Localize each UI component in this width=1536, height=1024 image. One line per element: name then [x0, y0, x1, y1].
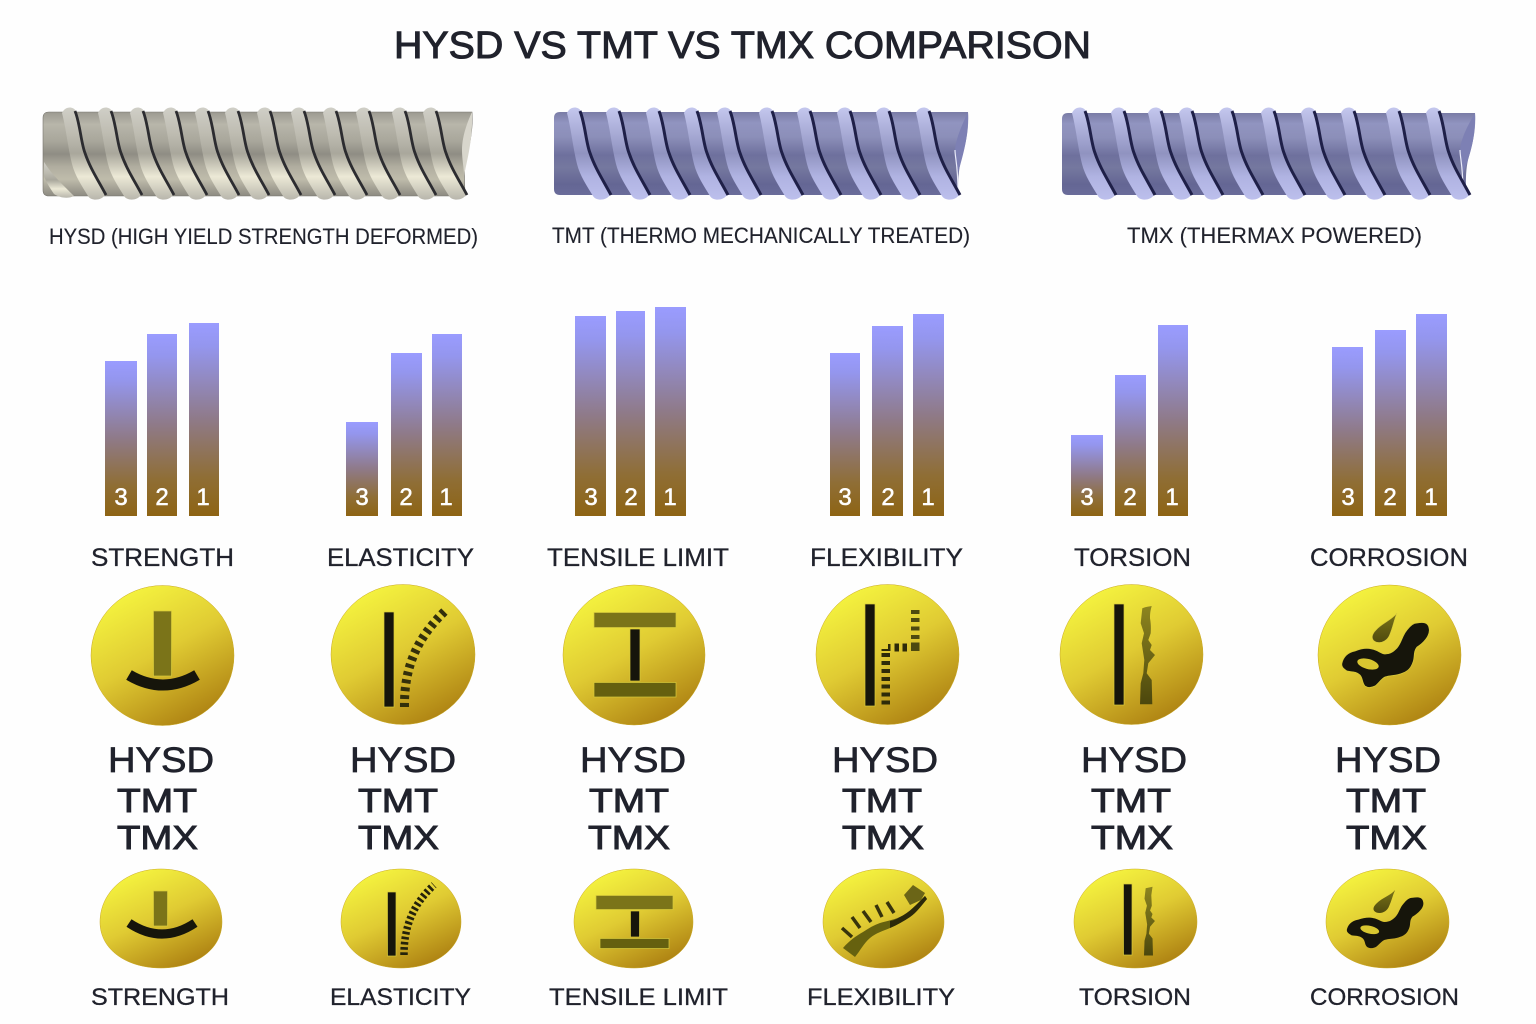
bar chart: strength: 3 [114, 484, 128, 511]
bottom label: strength: STRENGTH [91, 984, 229, 1011]
name stack: tensile limit column: TMT [589, 782, 669, 819]
bar chart: tensile limit: 2 [624, 484, 638, 511]
small icon: corrosion [1326, 869, 1449, 968]
name stack: tensile limit column [580, 741, 686, 856]
icon: corrosion [1318, 585, 1461, 725]
rebar illustration: TMX [1062, 107, 1475, 200]
small icon: elasticity [341, 869, 461, 968]
label: elasticity: ELASTICITY [327, 544, 474, 572]
bar chart: corrosion: 1 [1424, 484, 1438, 511]
name stack: strength column: HYSD [108, 741, 214, 780]
small icon: torsion [1074, 869, 1197, 968]
name stack: corrosion column: TMX [1346, 819, 1427, 856]
bar chart: flexibility: 2 [881, 484, 895, 511]
name stack: torsion column: TMT [1091, 782, 1171, 819]
small icon: flexibility [823, 869, 944, 968]
name stack: flexibility column: TMT [842, 782, 922, 819]
bottom label: corrosion: CORROSION [1310, 984, 1459, 1011]
name stack: strength column [108, 741, 214, 856]
bottom label: torsion: TORSION [1079, 984, 1191, 1011]
name stack: flexibility column [832, 741, 938, 856]
bar chart: elasticity: 3 [355, 484, 369, 511]
rebar illustration: TMT [554, 107, 968, 200]
name stack: corrosion column [1335, 741, 1441, 856]
bar chart: strength: 1 [196, 484, 210, 511]
name stack: elasticity column: TMT [358, 782, 438, 819]
icon: flexibility [816, 584, 959, 724]
bar chart: elasticity: 2 [399, 484, 413, 511]
bar chart: flexibility: 3 [838, 484, 852, 511]
title: HYSD VS TMT VS TMX COMPARISON [394, 25, 1091, 67]
bar chart: corrosion: 2 [1383, 484, 1397, 511]
icon: elasticity [331, 584, 475, 724]
bottom label: elasticity: ELASTICITY [330, 984, 471, 1011]
icon: strength [91, 586, 234, 726]
bar chart: torsion: 1 [1165, 484, 1179, 511]
rebar caption: TMX: TMX (THERMAX POWERED) [1127, 223, 1422, 248]
bar chart: torsion: 2 [1123, 484, 1137, 511]
bar chart: flexibility: 1 [921, 484, 935, 511]
bar chart: strength: 2 [155, 484, 169, 511]
panel: TMT rebar [552, 107, 970, 248]
rebar caption: TMT: TMT (THERMO MECHANICALLY TREATED) [552, 223, 970, 248]
bar chart: flexibility [830, 314, 944, 516]
label: torsion: TORSION [1074, 544, 1191, 572]
bar chart: corrosion: 3 [1341, 484, 1355, 511]
bar chart: corrosion [1332, 314, 1447, 516]
bar chart: torsion: 3 [1080, 484, 1094, 511]
bar chart: torsion [1071, 325, 1188, 516]
label: flexibility: FLEXIBILITY [810, 544, 963, 572]
name stack: flexibility column: TMX [842, 819, 924, 856]
name stack: corrosion column: TMT [1346, 782, 1426, 819]
panel: HYSD rebar [43, 107, 478, 249]
icon: tensile limit [563, 585, 705, 725]
label: tensile limit: TENSILE LIMIT [547, 544, 729, 572]
icon: torsion [1060, 584, 1203, 724]
name stack: elasticity column: TMX [358, 819, 439, 856]
label: strength: STRENGTH [91, 544, 234, 572]
bar chart: elasticity [346, 334, 462, 516]
name stack: torsion column: HYSD [1081, 741, 1187, 780]
name stack: strength column: TMT [117, 782, 197, 819]
name stack: elasticity column: HYSD [350, 741, 456, 780]
name stack: flexibility column: HYSD [832, 741, 938, 780]
rebar illustration: HYSD [43, 107, 472, 200]
name stack: torsion column: TMX [1091, 819, 1173, 856]
name stack: strength column: TMX [117, 819, 198, 856]
rebar caption: HYSD: HYSD (HIGH YIELD STRENGTH DEFORMED) [49, 224, 478, 249]
name stack: torsion column [1081, 741, 1187, 856]
label: corrosion: CORROSION [1310, 544, 1468, 572]
bottom label: flexibility: FLEXIBILITY [807, 984, 955, 1011]
bar chart: tensile limit: 1 [663, 484, 677, 511]
small icon: tensile limit [574, 869, 693, 968]
bottom label: tensile limit: TENSILE LIMIT [549, 984, 728, 1011]
bar chart: tensile limit [575, 307, 686, 516]
panel: TMX rebar [1062, 107, 1475, 248]
name stack: tensile limit column: HYSD [580, 741, 686, 780]
small icon: strength [100, 869, 222, 968]
name stack: corrosion column: HYSD [1335, 741, 1441, 780]
bar chart: elasticity: 1 [439, 484, 453, 511]
name stack: tensile limit column: TMX [588, 819, 670, 856]
name stack: elasticity column [350, 741, 456, 856]
bar chart: tensile limit: 3 [584, 484, 598, 511]
bar chart: strength [105, 323, 219, 516]
